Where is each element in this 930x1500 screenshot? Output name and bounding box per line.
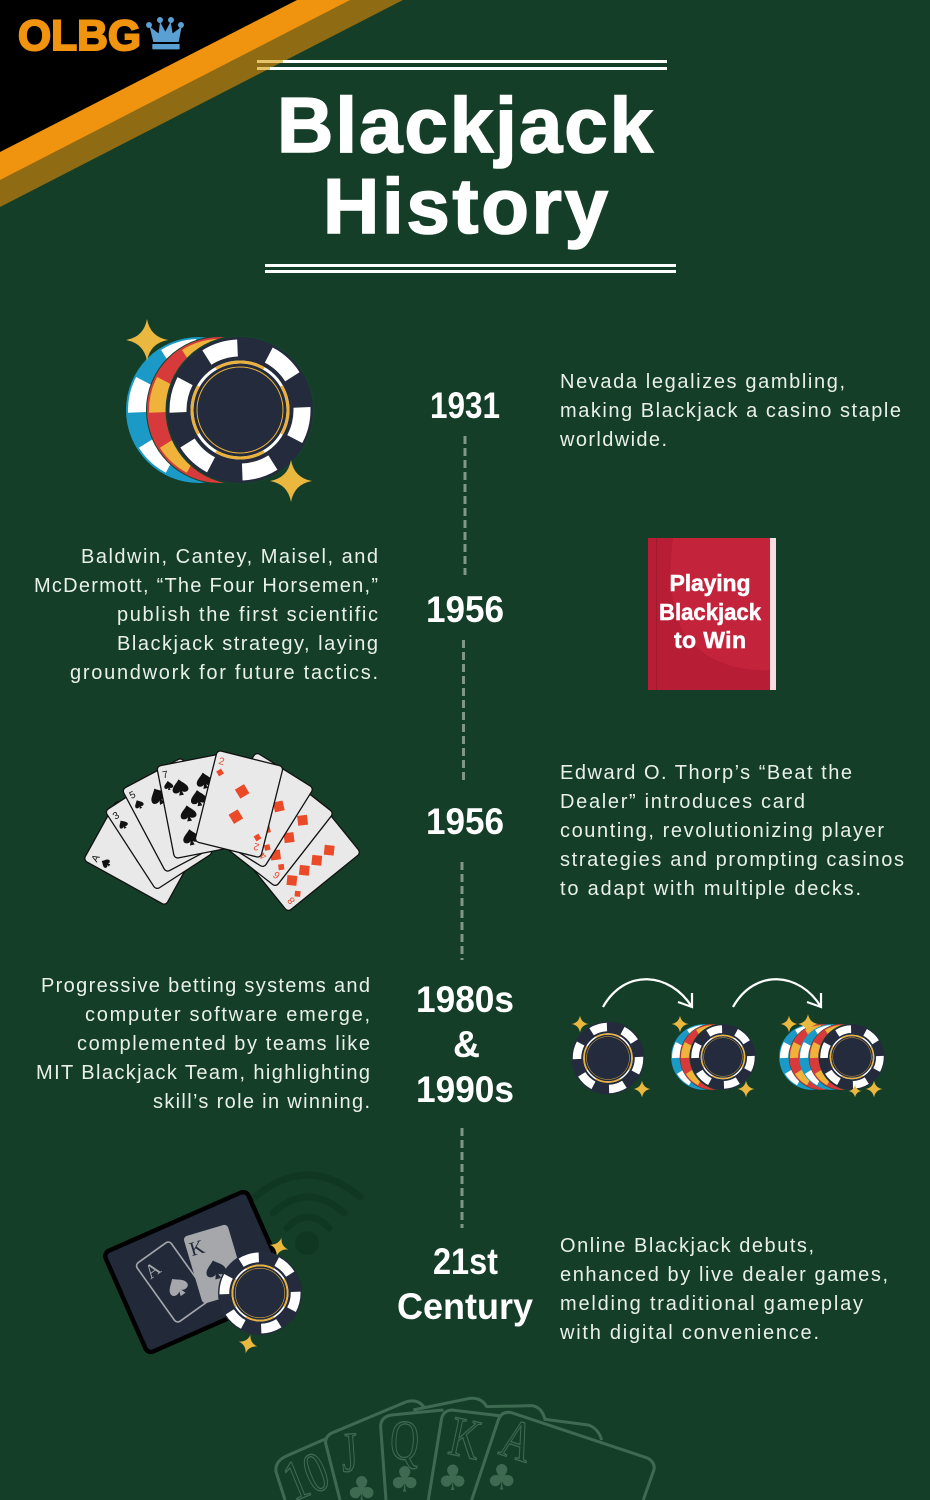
- decorative royal flush outline cards: Q: [389, 1407, 421, 1473]
- text: progressive betting: complemented by teams like: [77, 1033, 370, 1055]
- icon: tablet with cards, chip and wifi: [103, 1175, 360, 1356]
- text: Thorp: to adapt with multiple decks.: [560, 878, 861, 900]
- year 1980s and 1990s: [416, 979, 514, 1110]
- decorative royal flush outline cards: ♣: [486, 1458, 517, 1498]
- text: 1931: Nevada legalizes gambling,: [560, 371, 845, 393]
- year 1980s and 1990s: &: [453, 1024, 480, 1065]
- icon: book Playing Blackjack to Win: to Win: [674, 627, 746, 653]
- text: progressive betting: skill’s role in winning.: [153, 1091, 370, 1113]
- icon: fan of playing cards: 5: [128, 789, 138, 802]
- icon: fan of playing cards: 7: [162, 769, 170, 781]
- arrow 2: [733, 979, 821, 1007]
- text: 1931: [559, 371, 901, 451]
- text: Thorp: [560, 762, 904, 900]
- arrow 1: [603, 979, 692, 1007]
- text: Four Horsemen 1956: McDermott, “The Four Horsemen,”: [34, 575, 378, 597]
- icon: fan of playing cards: A: [90, 853, 103, 864]
- text: Thorp: Edward O. Thorp’s “Beat the: [560, 762, 852, 784]
- timeline connector 1: [464, 436, 466, 575]
- icon: fan of playing cards: 3: [111, 810, 122, 822]
- decorative royal flush outline cards: K: [444, 1404, 487, 1472]
- title: Blackjack: [277, 81, 654, 169]
- icon: fan of playing cards: 2: [252, 840, 261, 852]
- decorative royal flush outline cards: ♣: [437, 1459, 468, 1499]
- text: Four Horsemen 1956: publish the first scientific: [117, 604, 378, 626]
- text: progressive betting: computer software emerge,: [85, 1004, 370, 1026]
- corner banner: [0, 0, 403, 207]
- decorative royal flush outline cards: J: [339, 1420, 360, 1484]
- text: Thorp: counting, revolutionizing player: [560, 820, 884, 842]
- title: [277, 81, 654, 250]
- icon: fan of playing cards: 8: [285, 894, 298, 906]
- title rule bottom: [265, 264, 676, 273]
- text: Four Horsemen 1956: [34, 546, 378, 684]
- decorative royal flush outline cards: A: [493, 1405, 542, 1475]
- icon: book Playing Blackjack to Win: Blackjack: [659, 599, 761, 625]
- icon: fan of playing cards: 2: [217, 756, 226, 768]
- text: Four Horsemen 1956: Baldwin, Cantey, Maisel, and: [81, 546, 378, 568]
- title rule top: [257, 60, 667, 70]
- text: Thorp: strategies and prompting casinos: [560, 849, 904, 871]
- icon: five chips: [779, 1014, 886, 1097]
- text: progressive betting: Progressive betting systems and: [41, 975, 370, 997]
- text: online blackjack: [559, 1235, 888, 1344]
- year 1956 Thorp: 1956: [426, 801, 504, 842]
- icon: three chips: [671, 1016, 756, 1097]
- title: History: [323, 162, 608, 250]
- timeline connector 2: [462, 640, 465, 780]
- text: 1931: worldwide.: [559, 429, 667, 451]
- icon: tablet with cards, chip and wifi: A: [141, 1257, 166, 1284]
- icon: book Playing Blackjack to Win: [648, 538, 776, 690]
- year 1980s and 1990s: 1980s: [416, 979, 514, 1020]
- decorative royal flush outline cards: [274, 1398, 654, 1500]
- icon: book Playing Blackjack to Win: Playing: [670, 570, 750, 596]
- decorative royal flush outline cards: ♣: [389, 1461, 420, 1500]
- logo: OLBG with crown: OLBG: [18, 12, 141, 60]
- icon: fan of playing cards: 6: [271, 868, 283, 881]
- timeline connector 4: [460, 1128, 464, 1228]
- text: online blackjack: melding traditional gameplay: [560, 1293, 863, 1315]
- year 1931: 1931: [430, 385, 500, 426]
- text: online blackjack: Online Blackjack debuts,: [560, 1235, 814, 1257]
- text: 1931: making Blackjack a casino staple: [560, 400, 901, 422]
- icon: tablet with cards, chip and wifi: K: [187, 1236, 208, 1261]
- text: progressive betting: MIT Blackjack Team, highlighting: [36, 1062, 370, 1084]
- text: online blackjack: enhanced by live dealer games,: [560, 1264, 888, 1286]
- text: progressive betting: [36, 975, 370, 1113]
- text: Four Horsemen 1956: Blackjack strategy, laying: [117, 633, 378, 655]
- icon: fan of playing cards: [83, 750, 361, 912]
- text: online blackjack: with digital convenience.: [559, 1322, 819, 1344]
- year 21st Century: Century: [397, 1286, 533, 1327]
- year 1980s and 1990s: 1990s: [416, 1069, 514, 1110]
- year 21st Century: [397, 1241, 533, 1327]
- text: Four Horsemen 1956: groundwork for future tactics.: [70, 662, 378, 684]
- icon: stacked poker chips 1931: [126, 319, 314, 502]
- icon: fan of playing cards: 4: [258, 849, 269, 862]
- icon: single chip: [572, 1016, 650, 1097]
- timeline connector 3: [460, 862, 464, 960]
- text: Thorp: Dealer” introduces card: [560, 791, 805, 813]
- year 1956: 1956: [426, 589, 504, 630]
- year 21st Century: 21st: [433, 1241, 498, 1282]
